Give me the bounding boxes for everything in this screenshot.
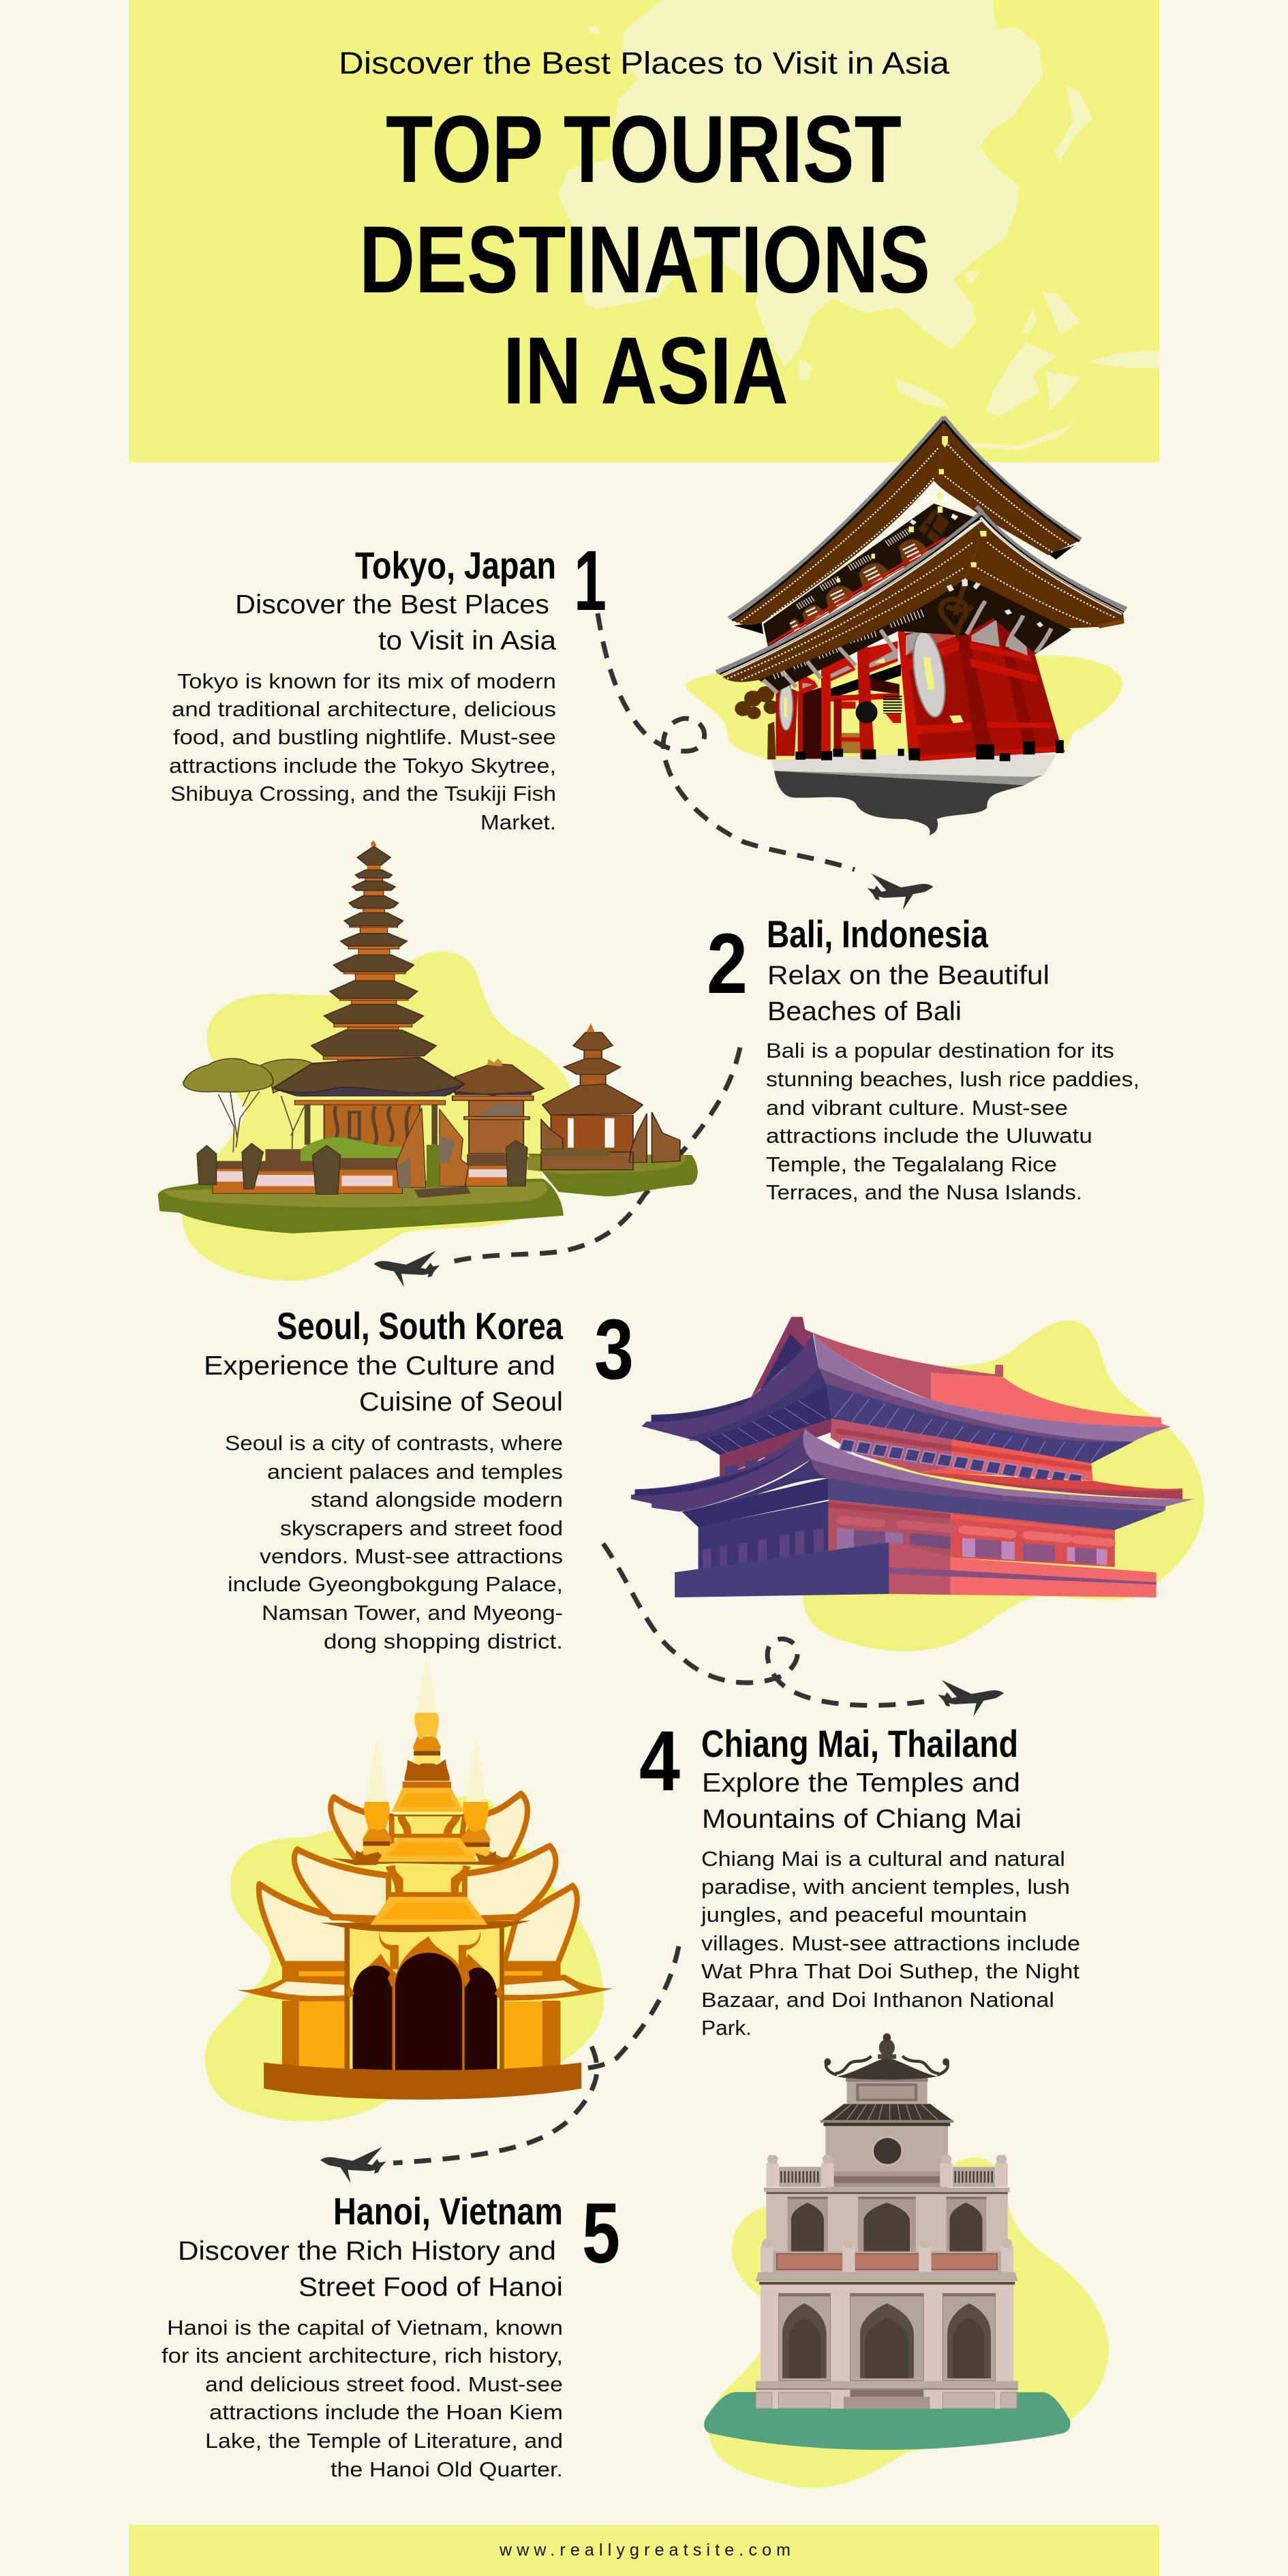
description: Hanoi: for its ancient architecture, rich history,: [162, 2344, 563, 2367]
icon: plane 3: [938, 1680, 1004, 1717]
description: Chiang Mai: Bazaar, and Doi Inthanon National: [701, 1988, 1054, 2012]
description: Hanoi: Hanoi is the capital of Vietnam, known: [167, 2316, 563, 2340]
description: Seoul: ancient palaces and temples: [267, 1460, 563, 1484]
subheading: Tokyo: [235, 590, 556, 656]
heading: Hanoi: Hanoi, Vietnam: [333, 2190, 563, 2233]
subheading: Chiang Mai: Mountains of Chiang Mai: [702, 1805, 1022, 1834]
subheading: Chiang Mai: [702, 1768, 1022, 1834]
description: Seoul: stand alongside modern: [311, 1488, 563, 1512]
footer band: [129, 2525, 1159, 2576]
illustration: Bali water temple: [158, 840, 698, 1281]
title: IN ASIA: [503, 317, 788, 424]
description: Tokyo: Market.: [480, 810, 556, 834]
description: Bali: stunning beaches, lush rice paddies,: [766, 1067, 1139, 1091]
description: Seoul: dong shopping district.: [324, 1629, 563, 1653]
description: Seoul: skyscrapers and street food: [280, 1516, 563, 1540]
subheading: Seoul: Experience the Culture and: [204, 1351, 555, 1381]
route: Bali to Seoul: [453, 1047, 740, 1261]
map of Asia watermark: [557, 0, 1159, 450]
subheading: Hanoi: [178, 2237, 563, 2302]
number 4: 4: [639, 1714, 680, 1809]
title: TOP TOURIST: [386, 95, 902, 202]
description: Tokyo: food, and bustling nightlife. Must-see: [173, 725, 556, 749]
description: Seoul: Namsan Tower, and Myeong-: [262, 1601, 563, 1625]
panel: header banner: [129, 0, 1159, 462]
description: Hanoi: the Hanoi Old Quarter.: [331, 2457, 563, 2481]
illustration: Seoul palace: [631, 1317, 1204, 1651]
description: Bali: Bali is a popular destination for its: [766, 1039, 1114, 1062]
subheading: Bali: [767, 961, 1049, 1026]
description: Hanoi: Lake, the Temple of Literature, and: [205, 2429, 563, 2453]
subheading: Tokyo: to Visit in Asia: [378, 626, 556, 656]
subheading: Tokyo: Discover the Best Places: [235, 590, 549, 619]
description: Seoul: Seoul is a city of contrasts, where: [225, 1431, 563, 1455]
section 2: Bali: [707, 913, 1139, 1204]
illustration: Chiang Mai temple: [205, 1655, 613, 2121]
description: Tokyo: [169, 669, 556, 834]
subheading: Hanoi: Discover the Rich History and: [178, 2237, 556, 2266]
website address: www.reallygreatsite.com: [499, 2541, 791, 2560]
subheading: Hanoi: Street Food of Hanoi: [298, 2273, 563, 2302]
section 1: Tokyo: [169, 534, 607, 834]
route: Chiang Mai to Hanoi: [393, 1946, 679, 2163]
subheading: Chiang Mai: Explore the Temples and: [702, 1768, 1020, 1798]
description: Chiang Mai: [701, 1847, 1080, 2040]
description: Hanoi: attractions include the Hoan Kiem: [209, 2400, 563, 2424]
description: Bali: attractions include the Uluwatu: [766, 1124, 1092, 1148]
description: Chiang Mai: jungles, and peaceful mountain: [701, 1903, 1027, 1927]
title: DESTINATIONS: [359, 206, 930, 313]
description: Bali: [766, 1039, 1139, 1204]
heading: Chiang Mai: Chiang Mai, Thailand: [701, 1722, 1018, 1765]
heading: Tokyo: Tokyo, Japan: [355, 544, 556, 587]
heading: Seoul: Seoul, South Korea: [277, 1304, 564, 1347]
route: Seoul to Chiang Mai: [603, 1544, 924, 1705]
description: Hanoi: [162, 2316, 563, 2481]
number 2: 2: [707, 917, 748, 1011]
description: Chiang Mai: Wat Phra That Doi Suthep, the Night: [701, 1959, 1079, 1983]
description: Tokyo: attractions include the Tokyo Skytree,: [169, 754, 556, 778]
icon: plane 2: [374, 1251, 440, 1287]
subheading: Bali: Beaches of Bali: [767, 997, 962, 1026]
title: [359, 95, 930, 424]
description: Seoul: [225, 1431, 563, 1653]
description: Seoul: vendors. Must-see attractions: [260, 1544, 563, 1568]
description: Tokyo: and traditional architecture, delicious: [172, 697, 556, 721]
description: Chiang Mai: Chiang Mai is a cultural and natural: [701, 1847, 1065, 1871]
number 3: 3: [594, 1302, 634, 1397]
section 4: Chiang Mai: [639, 1714, 1080, 2040]
description: Hanoi: and delicious street food. Must-see: [205, 2372, 563, 2396]
subtitle: Discover the Best Places to Visit in Asia: [339, 46, 950, 80]
description: Chiang Mai: villages. Must-see attractions include: [701, 1931, 1080, 1955]
subheading: Bali: Relax on the Beautiful: [767, 961, 1049, 990]
description: Chiang Mai: Park.: [701, 2016, 752, 2040]
subheading: Seoul: [204, 1351, 563, 1417]
description: Bali: Temple, the Tegalalang Rice: [766, 1152, 1057, 1176]
section 5: Hanoi: [162, 2186, 620, 2481]
icon: plane 1: [868, 874, 933, 910]
description: Bali: Terraces, and the Nusa Islands.: [766, 1180, 1082, 1204]
number 5: 5: [582, 2186, 620, 2281]
section 3: Seoul: [204, 1302, 634, 1653]
number 1: 1: [574, 534, 607, 628]
description: Tokyo: Shibuya Crossing, and the Tsukiji Fish: [170, 782, 556, 806]
description: Tokyo: Tokyo is known for its mix of modern: [177, 669, 556, 693]
route: Tokyo to Bali: [598, 613, 855, 870]
heading: Bali: Bali, Indonesia: [767, 913, 989, 955]
illustration: Tokyo temple gate: [686, 417, 1126, 835]
description: Chiang Mai: paradise, with ancient temples, lush: [701, 1875, 1070, 1899]
description: Seoul: include Gyeongbokgung Palace,: [228, 1572, 563, 1596]
illustration: Hanoi turtle tower: [704, 2034, 1109, 2488]
description: Bali: and vibrant culture. Must-see: [766, 1096, 1068, 1120]
subheading: Seoul: Cuisine of Seoul: [359, 1387, 563, 1417]
icon: plane 4: [320, 2147, 386, 2183]
